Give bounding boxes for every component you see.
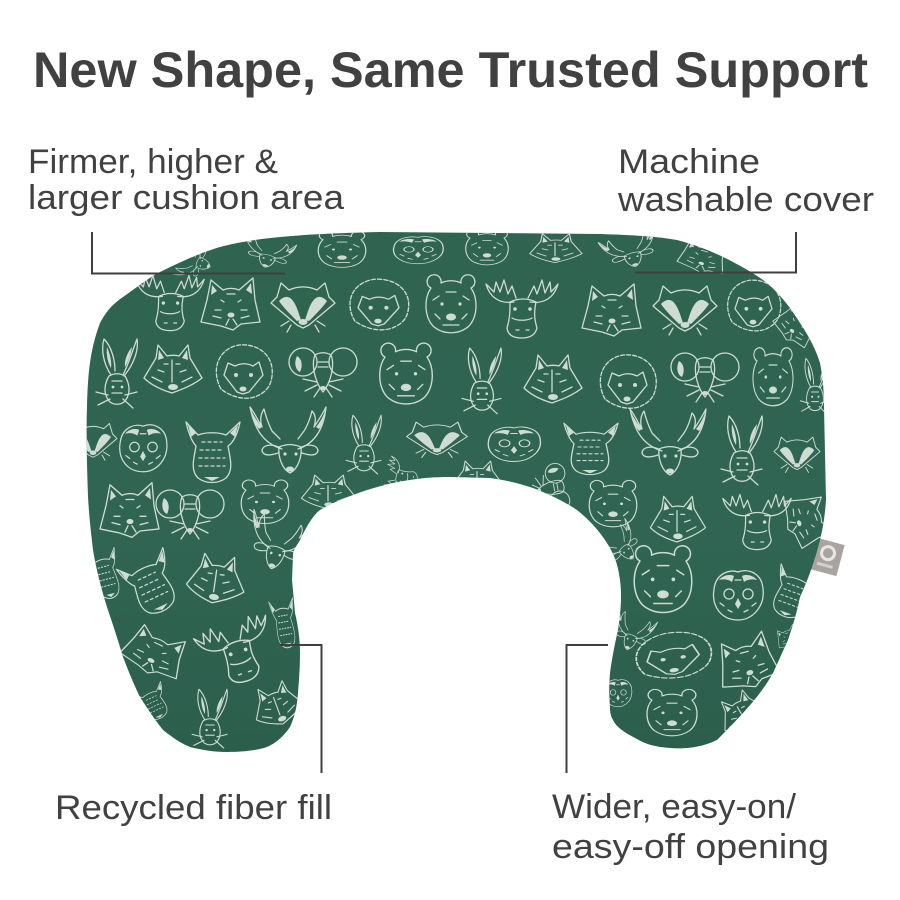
leader line: washable cover xyxy=(635,232,796,272)
title: New Shape, Same Trusted Support xyxy=(33,42,868,98)
label: wider opening: easy-off opening xyxy=(552,828,829,866)
label: firmer cushion xyxy=(28,143,344,217)
leader line: fiber fill xyxy=(280,645,322,773)
label: machine washable: Machine xyxy=(618,143,760,181)
leader line: cushion area xyxy=(92,232,285,274)
label: firmer cushion: Firmer, higher & xyxy=(28,143,278,181)
pillow xyxy=(69,228,845,752)
label: recycled fill: Recycled fiber fill xyxy=(55,789,332,827)
label: firmer cushion: larger cushion area xyxy=(28,179,344,217)
label: machine washable xyxy=(617,143,874,219)
label: wider opening: Wider, easy-on/ xyxy=(552,788,797,826)
leader line: opening xyxy=(566,645,608,773)
animal print pattern xyxy=(69,228,837,748)
label: wider opening xyxy=(552,788,829,866)
pillow body xyxy=(87,232,826,752)
tag: brand label xyxy=(810,538,845,576)
label: machine washable: washable cover xyxy=(617,181,874,219)
